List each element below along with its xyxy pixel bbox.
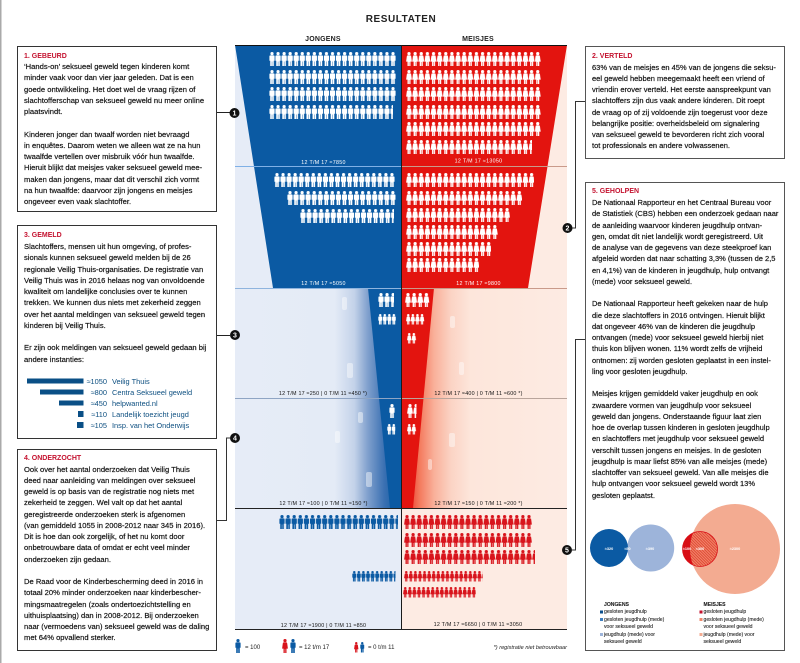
text: verteld: eel geweld hebben meegemaakt heeft een vriend of (592, 74, 765, 83)
connector 4: 4 (233, 436, 237, 442)
venn: meisjes: ≈100 (683, 547, 691, 551)
connector 1: 1 (233, 110, 237, 118)
text: gebeurd: twaalfde vertellen over misbruik vóór hun twaalfde. (24, 152, 195, 161)
text: onderzocht: Ook over het aantal onderzoeken dat Veilig Thuis (24, 464, 190, 474)
text: gebeurd: Hieruit blijkt dat meisjes vaker seksueel geweld mee- (24, 163, 202, 172)
text: onderzocht: Dit is hoe dan ook zorgelijk, of het nu komt door (24, 532, 184, 541)
text: geholpen: de analyse van de gegevens van deze steekproef kan (592, 243, 771, 252)
text: onderzocht: onbetrouwbare data of omdat er echt veel minder (24, 543, 190, 552)
bar chart: meldingen per instantie: ≈800 (91, 388, 107, 397)
legend: icon = 12 t/m 17 (282, 639, 330, 653)
panel: 1. gebeurd (17, 46, 217, 212)
text: geholpen: zwaardere vormen van jeugdhulp voor seksueel (592, 400, 751, 410)
text: gebeurd: maken dan jongens, maar dat dit verschil zich vormt (24, 174, 199, 184)
connector 5: 5 (565, 548, 569, 554)
legend: jongens: gesloten jeugdhulp (mede) (604, 617, 665, 623)
text: gebeurd (24, 62, 204, 206)
legend: icon = 0 t/m 11 (354, 642, 395, 652)
panel: 3. gemeld (17, 225, 217, 439)
funnel: jongens (235, 45, 401, 508)
legend: icon = 0 t/m 11: = 0 t/m 11 (368, 645, 395, 651)
text: onderzocht: totaal 20% minder onderzoeken naar kinderbescher- (24, 588, 201, 597)
text: geholpen: gen, omdat dit niet landelijk wordt geregistreerd. Uit (592, 232, 763, 241)
legend: jongens: jeugdhulp (mede) voor (603, 632, 655, 638)
label: section 2 jongens: 12 T/M 17 ≈5050 (301, 281, 346, 287)
text: gemeld: over het aantal meldingen van seksueel geweld tegen (24, 310, 205, 318)
text: gebeurd: minder vaak voor dan vier jaar geleden. Dat is een (24, 73, 194, 82)
label: section 3 meisjes: 12 T/M 17 ≈400 | 0 T/M 11 ≈600 *) (434, 391, 523, 397)
icons: section 5 jongens (279, 515, 398, 582)
legend: icon = 12 t/m 17: = 12 t/m 17 (299, 645, 330, 651)
venn: jongens: ≈390 (646, 547, 654, 551)
text: onderzocht: met 64% opvallend sterker. (24, 633, 116, 642)
text: gebeurd: ‘Hands-on’ seksueel geweld tegen kinderen komt (24, 62, 189, 71)
text: gemeld: Er zijn ook meldingen van seksueel geweld gedaan bij (24, 343, 206, 352)
legend: meisjes: MEISJES (704, 602, 726, 608)
text: geholpen: De Nationaal Rapporteur en het Centraal Bureau voor (592, 198, 771, 207)
panel: 5. geholpen (585, 182, 785, 651)
legend: meisjes: gesloten jeugdhulp (704, 609, 746, 615)
heading: jongens: JONGENS (305, 36, 341, 43)
panel: 2. verteld (585, 46, 785, 159)
label: section 3 jongens: 12 T/M 17 ≈250 | 0 T/M 11 ≈450 *) (279, 391, 367, 397)
text: verteld: van seksueel geweld te bevorderen richt zich vooral (592, 130, 764, 139)
text: onderzocht: naar (vermoedens van) seksueel geweld was de daling (24, 622, 209, 631)
connector 2: 2 (566, 226, 570, 232)
connector 3: 3 (233, 332, 237, 340)
panel: 4. onderzocht (17, 449, 217, 651)
bar chart: meldingen per instantie: Centra Seksueel geweld (112, 388, 192, 397)
label: section 4 jongens: 12 T/M 17 ≈100 | 0 T/M 11 ≈150 *) (279, 501, 368, 507)
venn: meisjes: ≈2300 (730, 547, 740, 551)
text: gebeurd: ongeveer even vaak slachtoffer. (24, 197, 131, 206)
bar chart: meldingen per instantie: ≈105 (91, 421, 107, 430)
text: onderzocht: deed naar aanleiding van meldingen over seksueel (24, 476, 195, 485)
venn: jongens: ≈320 (605, 547, 613, 551)
icons: section 2 meisjes (406, 173, 534, 272)
connector 5 (562, 340, 585, 555)
label: section 5 meisjes: 12 T/M 17 ≈6650 | 0 T/M 11 ≈3050 (434, 622, 522, 628)
text: geholpen: verschilt tussen jongens en meisjes. In de gesloten (592, 446, 761, 454)
title: RESULTATEN (366, 14, 436, 25)
text: onderzocht: De Raad voor de Kinderbescherming deed in 2016 in (24, 577, 203, 586)
text: gebeurd: in enquêtes. Daarom weten we alleen wat ze na hun (24, 141, 200, 150)
heading: verteld: 2. VERTELD (592, 52, 632, 60)
text: onderzocht: onderzoeken zijn gedaan. (24, 554, 111, 564)
text: gemeld: sionals kunnen seksueel geweld melden bij de 26 (24, 253, 191, 262)
text: geholpen: (mede) voor seksueel geweld. (592, 277, 692, 286)
text: geholpen: hulp ontvangen voor seksueel geweld wordt 13% (592, 479, 755, 488)
text: onderzocht: geweld is op basis van de registratie nog niets met (24, 487, 194, 496)
legend: meisjes: seksueel geweld (704, 639, 741, 645)
heading: meisjes: MEISJES (462, 36, 494, 43)
heading: gemeld: 3. GEMELD (24, 232, 62, 239)
ghost icons: section 4 (335, 412, 455, 487)
text: onderzocht (24, 464, 209, 642)
legend: jongens: voor seksueel geweld (604, 624, 653, 630)
venn diagrams and legend (590, 504, 780, 645)
text: gemeld: kinderen bij Veilig Thuis. (24, 321, 106, 330)
text: geholpen: ontnomen: zij worden gesloten geplaatst in een instel- (592, 356, 771, 364)
venn: meisjes (682, 504, 780, 594)
text: gemeld: Veilig Thuis was in 2016 helaas nog van onvoldoende (24, 276, 205, 285)
label: section 5 jongens: 12 T/M 17 ≈1900 | 0 T/M 11 ≈850 (281, 623, 366, 629)
text: gebeurd: na hun twaalfde: daarvoor zijn jongens en meisjes (24, 186, 192, 195)
bar chart: meldingen per instantie: Landelijk toezicht jeugd (112, 410, 189, 419)
bar chart: meldingen per instantie: Veilig Thuis (112, 377, 150, 386)
funnel: meisjes (401, 45, 567, 508)
venn: meisjes: ≈300 (696, 547, 704, 551)
chart backgrounds (235, 45, 567, 629)
text: gebeurd: slachtofferschap van seksueel geweld nu meer online (24, 96, 204, 105)
footnote: *) registratie niet betrouwbaar (494, 645, 568, 651)
icons: section 3 meisjes (405, 293, 430, 344)
text: geholpen: jeugdhulp is maar liefst 85% van alle meisjes (mede) (592, 457, 767, 466)
text: gemeld: trekken. We kunnen dus niets met zekerheid zeggen (24, 298, 201, 307)
legend: jongens (600, 602, 665, 645)
heading: geholpen: 5. GEHOLPEN (592, 188, 639, 195)
text: onderzocht: uithuisplaatsing) dan in 2008-2012. Bij onderzoeken (24, 611, 199, 620)
text: geholpen: De Nationaal Rapporteur heeft gekeken naar de hulp (592, 299, 768, 308)
text: onderzocht: geregistreerde onderzoeken sterk is afgenomen (24, 510, 185, 518)
label: section 4 meisjes: 12 T/M 17 ≈150 | 0 T/M 11 ≈200 *) (434, 501, 523, 507)
text: onderzocht: (van gemiddeld 1055 in 2008-2012 naar 345 in 2016). (24, 521, 205, 530)
text: gebeurd: goede ontwikkeling. Het doet wel de vraag rijzen of (24, 84, 195, 94)
label: section 2 meisjes: 12 T/M 17 ≈9800 (456, 281, 501, 287)
connector 1 (216, 108, 240, 118)
ghost icons: section 3 (342, 297, 464, 378)
text: geholpen: en slachtoffers met jeugdhulp voor seksueel geweld (592, 434, 764, 443)
venn: jongens (590, 524, 674, 572)
label: section 1 jongens: 12 T/M 17 ≈7850 (301, 160, 346, 166)
text: geholpen: afgeleid worden dat naar schatting 3,3% (tussen de 2,5 (592, 254, 775, 263)
text: gemeld (24, 242, 206, 364)
text: verteld (592, 62, 776, 150)
text: geholpen: slachtoffer van seksueel geweld. Van alle meisjes die (592, 468, 768, 477)
text: geholpen: geweld dan jongens. Onderstaande figuur laat zien (592, 412, 761, 421)
text: verteld: de vraag op of zij voldoende zijn toegerust voor deze (592, 108, 768, 116)
text: gemeld: Slachtoffers, mensen uit hun omgeving, of profes- (24, 242, 191, 251)
text: gemeld: andere instanties: (24, 354, 84, 364)
text: geholpen (592, 198, 778, 500)
text: geholpen: de aanleiding waarvoor kinderen jeugdhulp ontvan- (592, 220, 762, 230)
text: onderzocht: zekerheid te zeggen. Wel valt op dat het aantal (24, 498, 182, 507)
text: gebeurd: plaatsvindt. (24, 107, 62, 116)
text: geholpen: hoe de overlap tussen kinderen in gesloten jeugdhulp (592, 423, 770, 432)
text: gemeld: regionale Veilig Thuis-organisaties. De registratie van (24, 264, 203, 274)
text: verteld: 63% van de meisjes en 45% van de jongens die seksu- (592, 62, 776, 72)
text: geholpen: dat ongeveer 46% van de kinderen die jeugdhulp (592, 322, 755, 331)
text: verteld: belangrijke positie: overheidsbeleid om signalering (592, 119, 760, 128)
text: geholpen: Meisjes krijgen gemiddeld vaker jeugdhulp en ook (592, 389, 758, 398)
legend: icon = 100: = 100 (245, 645, 261, 651)
legend: meisjes: jeugdhulp (mede) voor (702, 632, 755, 638)
text: geholpen: thuis kon blijven wonen. 11% wordt zelfs de vrijheid (592, 344, 762, 353)
text: gebeurd: Kinderen jonger dan twaalf worden niet bevraagd (24, 130, 190, 138)
legend: meisjes: voor seksueel geweld (704, 624, 753, 630)
legend: meisjes (700, 602, 764, 645)
icons: section 3 jongens (378, 293, 396, 324)
icons: section 4 meisjes (407, 404, 416, 434)
text: geholpen: de Statistiek (CBS) hebben een onderzoek gedaan naar (592, 209, 778, 218)
icons: section 5 meisjes (403, 515, 535, 598)
legend: jongens: gesloten jeugdhulp (604, 609, 647, 615)
bar chart: meldingen per instantie: ≈450 (91, 399, 107, 408)
legend: meisjes: gesloten jeugdhulp (mede) (704, 617, 764, 623)
left page edge (0, 0, 2, 663)
bar chart: meldingen per instantie (27, 377, 192, 430)
text: verteld: vriendin erover verteld. Het eerste aanspreekpunt van (592, 85, 771, 94)
bar chart: meldingen per instantie: ≈110 (91, 410, 107, 419)
text: verteld: tot professionals en andere volwassenen. (592, 141, 730, 150)
connector 4 (216, 433, 240, 520)
icons: section 2 jongens (274, 173, 396, 223)
text: gemeld: kwaliteit om landelijke conclusies over te kunnen (24, 287, 187, 296)
bar chart: meldingen per instantie: helpwanted.nl (112, 399, 158, 408)
icons: section 1 meisjes (406, 52, 541, 154)
text: verteld: slachtoffers zijn dus vaak andere kinderen. Dit roept (592, 96, 764, 105)
bar chart: meldingen per instantie: Insp. van het Onderwijs (112, 421, 190, 430)
label: section 1 meisjes: 12 T/M 17 ≈13050 (455, 158, 502, 164)
text: geholpen: gesloten geplaatst. (592, 490, 655, 500)
bar chart: meldingen per instantie: ≈1050 (86, 377, 107, 386)
connector 3 (216, 330, 240, 340)
legend: jongens: seksueel geweld (604, 639, 642, 645)
legend: jongens: JONGENS (604, 602, 630, 608)
connector 2 (562, 102, 585, 233)
text: geholpen: die deze slachtoffers in 2016 ontvingen. Hieruit blijkt (592, 310, 765, 320)
icons: section 4 jongens (387, 404, 395, 434)
text: geholpen: ling voor gesloten jeugdhulp. (592, 367, 688, 376)
legend: icon = 100 (235, 639, 261, 653)
icons: section 1 jongens (269, 52, 396, 119)
heading: gebeurd: 1. GEBEURD (24, 52, 67, 60)
venn: jongens: ≈50 (624, 547, 631, 551)
text: onderzocht: mingsmaatregelen (zoals ondertoezichtstelling en (24, 600, 191, 608)
text: geholpen: ontvangen (mede) voor seksueel geweld hierbij niet (592, 333, 763, 342)
heading: onderzocht: 4. ONDERZOCHT (24, 454, 81, 462)
text: geholpen: en 4,1%) van de kinderen in jeugdhulp, hulp ontvangt (592, 266, 769, 274)
